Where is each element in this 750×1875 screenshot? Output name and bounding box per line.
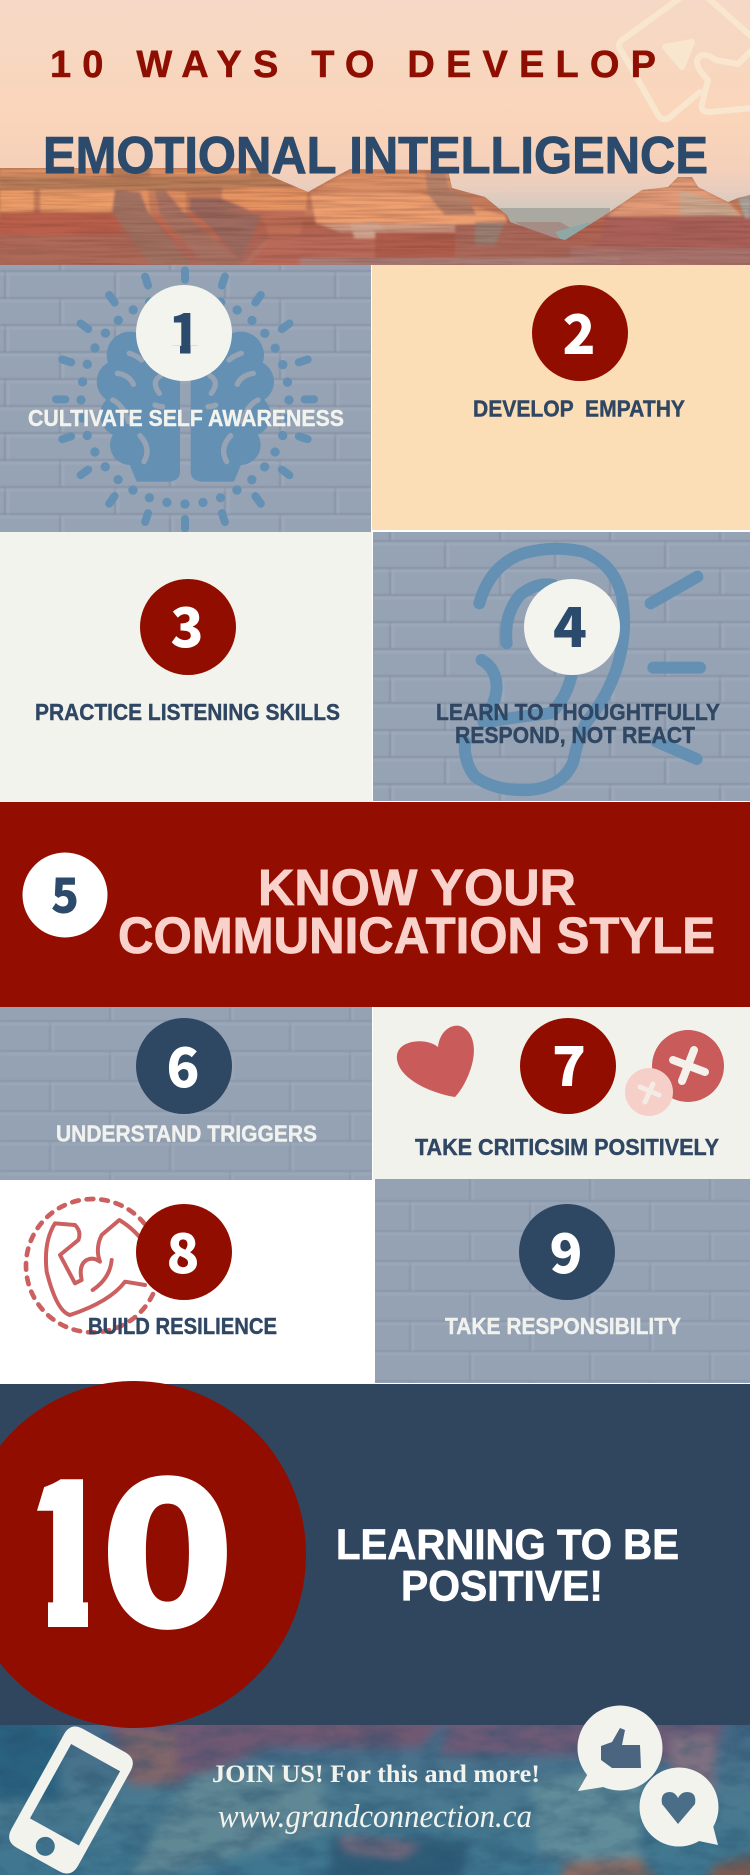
number badge 4 [524,579,620,675]
number badge 10: 0 [99,1390,236,1687]
panel 7: take criticism positively [373,1007,750,1179]
number badge 7 [520,1018,616,1114]
icon: large plus circle [652,1030,724,1102]
label 9: TAKE RESPONSIBILITY [445,1313,681,1339]
number badge 6: 6 [166,1023,200,1103]
number badge 6 [136,1018,232,1114]
icon: ear with sound lines [465,549,700,790]
number badge 3 [140,579,236,675]
number badge 10: 1 [4,1390,124,1687]
number badge 7: 7 [552,1022,586,1102]
number badge 8: 8 [166,1209,200,1289]
panel 5: communication style banner [0,802,750,1007]
icon: small plus circle [625,1068,673,1116]
icon: heart [397,1026,474,1097]
text: join us: JOIN US! For this and more! [212,1761,540,1788]
label 1: CULTIVATE SELF AWARENESS [28,405,344,431]
label 8: BUILD RESILIENCE [88,1313,277,1339]
icon: flexed arm in dashed circle [26,1199,159,1332]
heading 10: POSITIVE! [401,1562,603,1610]
number badge 10 [0,1381,306,1728]
footer rock texture [0,1715,750,1875]
label 4: LEARN TO THOUGHTFULLY [436,699,720,725]
heading 5: COMMUNICATION STYLE [118,907,715,964]
panel 10: learning to be positive [0,1384,750,1725]
label 6: UNDERSTAND TRIGGERS [56,1120,317,1146]
panel 1: cultivate self awareness [0,265,371,532]
number badge 9 [519,1204,615,1300]
label 4 [436,699,720,748]
icon: heart speech bubble [640,1768,718,1846]
panel: footer canyon [0,1706,750,1875]
distant ridge [500,208,610,265]
title line 2: EMOTIONAL INTELLIGENCE [43,127,708,185]
heading 5 [118,859,715,964]
number badge 1 [136,285,232,381]
number badge 1: 1 [168,289,201,369]
number badge 8 [136,1204,232,1300]
icon: smartphone [5,1722,137,1875]
panel 4: respond not react [373,532,750,801]
panel 2: develop empathy [372,265,750,530]
number badge 4: 4 [553,583,587,663]
label 2: DEVELOP EMPATHY [473,396,685,422]
label 7: TAKE CRITICSIM POSITIVELY [415,1134,719,1160]
heading 10 [336,1521,679,1610]
panel 9: take responsibility [375,1179,750,1383]
number badge 2: 2 [562,290,596,370]
panel 6: understand triggers [0,1007,372,1180]
number badge 3: 3 [170,583,204,663]
heading 5: KNOW YOUR [258,859,576,916]
panel: header landscape [0,0,750,265]
icon: brain with rays [56,270,314,528]
label 4: RESPOND, NOT REACT [455,722,695,748]
number badge 9: 9 [550,1209,582,1289]
icon: tablet and pointing hand [619,0,750,119]
label 3: PRACTICE LISTENING SKILLS [35,699,340,725]
number badge 5: 5 [51,857,79,928]
icon: thumbs up speech bubble [578,1706,662,1791]
number badge 2 [532,285,628,381]
number badge 5 [22,852,108,938]
heading 10: LEARNING TO BE [336,1521,679,1569]
panel 8: build resilience [0,1180,374,1384]
panel 3: practice listening skills [0,532,372,802]
canyon rocks [0,160,750,265]
text: website: www.grandconnection.ca [218,1799,532,1835]
title line 1: 10 WAYS TO DEVELOP [50,44,656,86]
